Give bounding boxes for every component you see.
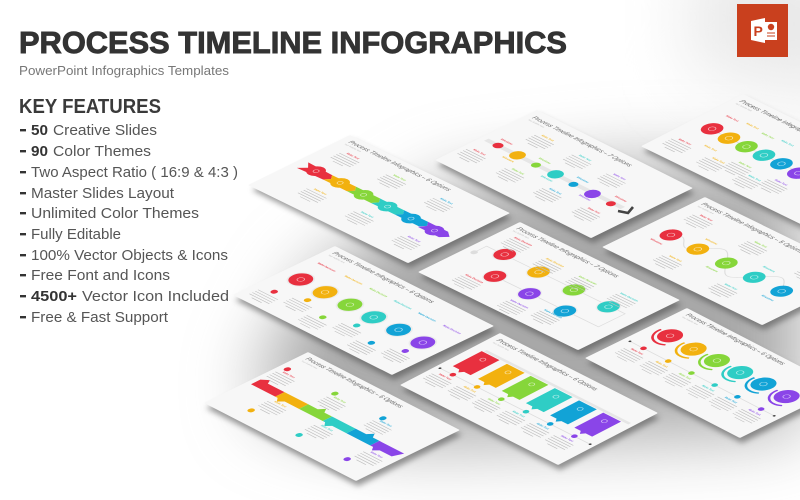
slide: milestone line, top middle: Make Text (540, 134, 555, 142)
slide: milestone line, top middle: Make Text (472, 148, 487, 156)
slide: five step wave, middle right: Make Text (668, 255, 683, 262)
slide: milestone line, top middle: Milestone (501, 156, 516, 163)
slide: circles with dots, middle left: Make Decision (392, 300, 413, 310)
feature list: 100% Vector Objects & Icons (31, 247, 228, 264)
slide: five step wave, middle right (602, 197, 800, 325)
slide: colour cards, bottom middle: Make Text (559, 435, 575, 442)
slide: snake process, centre: Make Decision (543, 309, 564, 319)
feature list: 90 (31, 143, 48, 160)
slide: colour cards, bottom middle: Process Timeline Infographics – 6 Options (494, 338, 599, 392)
slide: colour cards, bottom middle: Make Text (437, 373, 453, 381)
slide: snake process, centre: Make Decision (513, 236, 534, 247)
slide: ribbon timeline, top left: Make Text (406, 235, 422, 243)
slide: milestone line, top middle: Milestone (539, 175, 555, 182)
slide: crescent circles, bottom right: Make Text (629, 348, 645, 355)
subtitle: PowerPoint Infographics Templates (19, 63, 230, 78)
slide: circles row, top right: Make Text (745, 122, 760, 130)
feature list: Unlimited Color Themes (31, 205, 199, 222)
slide: snake process, centre: Make Decision (577, 275, 599, 285)
feature list (20, 122, 238, 326)
slide: ribbon timeline, top left: Make Text (345, 152, 361, 160)
feature list: 4500+ (31, 288, 77, 305)
slide: milestone line, top middle: Make Text (586, 207, 602, 214)
slide: five step wave, middle right: Make Text (698, 214, 714, 222)
slide: circles with dots, middle left: Make Decision (442, 324, 463, 335)
slide: circles row, top right: Make Text (677, 138, 693, 146)
slide: snake process, centre: Process Timeline Infographics – 7 Options (514, 227, 621, 279)
feature list: Color Themes (53, 143, 151, 160)
slide: arrow band timeline, bottom left: Make Text (332, 396, 347, 404)
slide: circles row, top right: Make Text (780, 139, 795, 147)
slide: colour cards, bottom middle: Make Text (511, 410, 526, 418)
slide: five step wave, middle right: Make Text (753, 241, 769, 248)
feature list: Creative Slides (53, 122, 157, 139)
slide: colour cards, bottom middle: Your Subtitle Here (491, 342, 510, 352)
slide: circles with dots, middle left: Process Timeline Infographics – 6 Options (330, 251, 436, 304)
slide: arrow band timeline, bottom left: Process Timeline Infographics – 6 Options (303, 357, 405, 409)
slide: circles row, top right: Make Text (737, 161, 753, 169)
slide: ribbon timeline, top left: Make Text (439, 197, 454, 205)
slide: colour cards, bottom middle: Make Text (462, 385, 478, 393)
slide: five step wave, middle right: Milestone (761, 265, 777, 273)
slide: five step wave, middle right: Milestone (760, 294, 776, 302)
feature list: Free & Fast Support (31, 309, 169, 326)
slide: snake process, centre (418, 222, 680, 350)
slide: circles row, top right: Make Text (747, 174, 762, 182)
slide: crescent circles, bottom right: Make Text (747, 408, 762, 416)
slide: milestone line, top middle (435, 110, 693, 238)
slide: arrow band timeline, bottom left: Your Subtitle Here (300, 360, 319, 370)
icon: PowerPoint logo: P (754, 23, 763, 39)
slide: colour cards, bottom middle: Make Text (486, 398, 502, 405)
slide drop shadows (206, 99, 800, 486)
slide: milestone line, top middle: Milestone (499, 138, 515, 146)
slide: milestone line, top middle: Make Text (510, 168, 526, 175)
slide: milestone line, top middle: Milestone (577, 194, 593, 202)
slide: milestone line, top middle: Your Subtitle Here (527, 119, 546, 129)
slide: circles row, top right: Make Text (773, 179, 789, 186)
slide: crescent circles, bottom right: Make Text (677, 372, 693, 380)
slide: ribbon timeline, top left (248, 135, 510, 263)
feature list: Vector Icon Included (82, 288, 229, 305)
slide: circles with dots, middle left: Make Decision (417, 312, 438, 322)
slide: milestone line, top middle: Make Text (612, 173, 627, 181)
feature list: Fully Editable (31, 226, 121, 243)
slide: snake process, centre: Your Subtitle Here (511, 230, 531, 239)
slide: circles row, top right: Make Text (760, 132, 776, 140)
slide: ribbon timeline, top left: Make Text (392, 174, 407, 182)
slide: ribbon timeline, top left: Process Timeline Infographics – 6 Options (346, 140, 453, 192)
slide: colour cards, bottom middle (400, 333, 658, 465)
slide: snake process, centre: Make Decision (544, 257, 566, 268)
slide: five step wave, middle right: Your Subtitle Here (696, 205, 715, 215)
slide: crescent circles, bottom right: Make Text (701, 384, 716, 392)
icon: PowerPoint logo (737, 4, 788, 57)
slide: crescent circles, bottom right: Make Text (654, 360, 669, 368)
slide: milestone line, top middle: Make Text (548, 187, 563, 195)
slide: colour cards, bottom middle: Make Text (535, 422, 551, 430)
slide: circles with dots, middle left: Make Decision (368, 287, 389, 298)
slide: circles with dots, middle left: Your Subtitle Here (327, 254, 346, 264)
heading: key features: KEY FEATURES (19, 96, 161, 118)
slide: arrow band timeline, bottom left: Make Text (319, 424, 335, 432)
slide: arrow band timeline, bottom left: Make Text (369, 451, 384, 459)
slide: snake process, centre: Make Decision (464, 273, 485, 284)
slide: five step wave, middle right: Milestone (704, 265, 720, 273)
slide: five step wave, middle right: Make Text (723, 283, 739, 291)
slide: five step wave, middle right: Milestone (649, 238, 664, 245)
slide: crescent circles, bottom right: Your Subtitle Here (680, 316, 699, 326)
background shadow (255, 0, 800, 445)
slide: crescent circles, bottom right: Make Text (723, 396, 739, 404)
slide: crescent circles, bottom right: Process Timeline Infographics – 6 Options (683, 313, 787, 366)
slide: arrow band timeline, bottom left: Make Text (378, 420, 393, 427)
slide: ribbon timeline, top left: Make Text (312, 188, 328, 195)
slide: milestone line, top middle: Process Timeline Infographics – 7 Options (530, 116, 634, 168)
slide: arrow band timeline, bottom left: Make Text (273, 400, 288, 408)
slide: arrow band timeline, bottom left: Make Text (281, 371, 296, 379)
slide: circles with dots, middle left (233, 246, 494, 375)
feature list: Two Aspect Ratio ( 16:9 & 4:3 ) (31, 164, 238, 181)
slide: milestone line, top middle: Milestone (575, 176, 591, 184)
slide: circles row, top right: Make Text (711, 157, 726, 164)
slide: circles row, top right (641, 94, 800, 224)
title: PROCESS TIMELINE INFOGRAPHICS (19, 25, 567, 60)
slide: arrow band timeline, bottom left (204, 352, 460, 481)
feature list: Free Font and Icons (31, 267, 170, 284)
slide: milestone line, top middle: Make Text (577, 154, 593, 162)
slide: circles row, top right: Make Text (703, 144, 718, 152)
slide: snake process, centre: Make Decision (619, 292, 640, 302)
slide: crescent circles, bottom right (585, 308, 800, 438)
feature list: 50 (31, 122, 48, 139)
slide: milestone line, top middle: Milestone (537, 157, 553, 165)
icon: dark chevron (618, 207, 633, 213)
slide: circles with dots, middle left: Make Decision (316, 262, 337, 272)
slide: circles row, top right: Your Subtitle Here (734, 103, 753, 112)
slide: ribbon timeline, top left: Your Subtitle Here (343, 143, 363, 153)
slide: circles with dots, middle left: Make Decision (343, 275, 364, 285)
slide: ribbon timeline, top left: Make Text (359, 211, 375, 218)
feature list: Master Slides Layout (31, 185, 175, 202)
slide: circles row, top right: Make Text (725, 115, 740, 122)
slide: snake process, centre: Make Decision (509, 299, 530, 309)
slide: milestone line, top middle: Milestone (613, 195, 629, 203)
slide: five step wave, middle right: Milestone (704, 238, 719, 245)
